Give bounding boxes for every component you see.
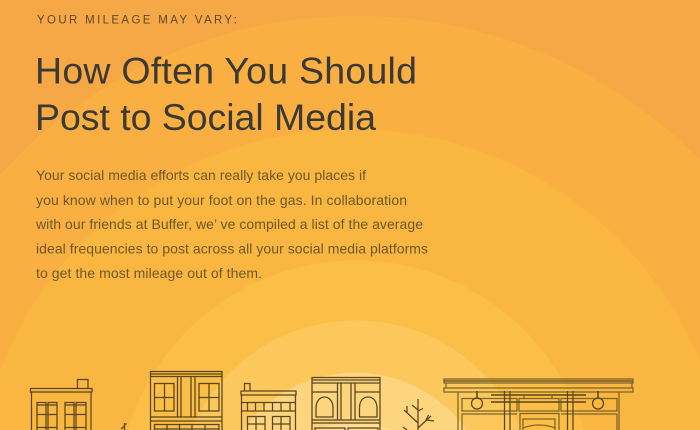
intro paragraph [35, 167, 428, 281]
intro paragraph: to get the most mileage out of them. [36, 265, 262, 281]
building 5: storefront [444, 379, 633, 430]
street scene illustration [30, 372, 633, 430]
building 4 [312, 378, 380, 430]
kicker heading: YOUR MILEAGE MAY VARY: [37, 14, 237, 26]
building 1 [30, 380, 92, 430]
intro paragraph: Your social media efforts can really take you places if [36, 167, 366, 183]
bare tree [403, 399, 434, 430]
title: How Often You Should [35, 50, 417, 92]
title: Post to Social Media [35, 96, 376, 138]
intro paragraph: you know when to put your foot on the gas. In collaboration [36, 192, 407, 208]
building 3 [241, 384, 296, 430]
title [35, 50, 417, 138]
building 2 [150, 372, 222, 430]
small tree [121, 423, 126, 430]
intro paragraph: with our friends at Buffer, we’ ve compiled a list of the average [35, 216, 423, 232]
intro paragraph: ideal frequencies to post across all your social media platforms [36, 240, 428, 256]
